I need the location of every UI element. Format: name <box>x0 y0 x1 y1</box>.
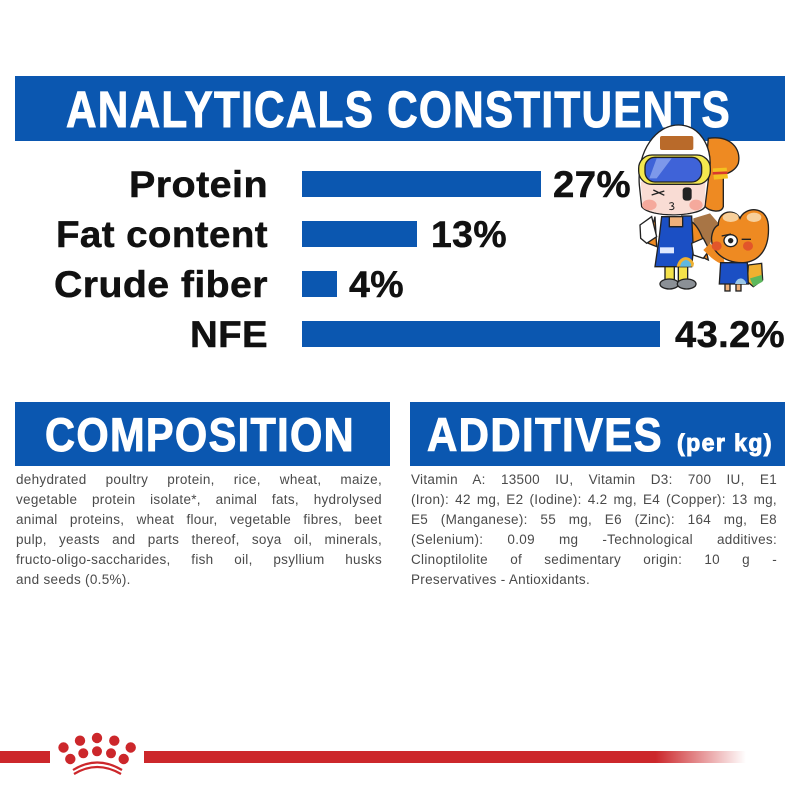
bear <box>703 210 768 291</box>
additives text <box>411 472 777 587</box>
row: NFE: 43.2% <box>675 314 785 355</box>
composition text <box>16 472 382 587</box>
row: crude fiber: 4% <box>349 264 404 305</box>
row: fat content: Fat content <box>56 214 268 255</box>
row: fat content: 13% <box>431 214 507 255</box>
row: NFE: NFE <box>190 314 268 355</box>
additives text: Preservatives - Antioxidants. <box>411 572 590 587</box>
row: fat content <box>56 214 507 255</box>
bar chart: analytical constituents <box>54 164 785 355</box>
composition text: pulp, yeasts and parts thereof, soya oil, minerals, <box>16 532 382 547</box>
additives text: Clinoptilolite of sedimentary origin: 10 g - <box>411 552 777 567</box>
additives text: (Iron): 42 mg, E2 (Iodine): 4.2 mg, E4 (Copper): 13 mg, <box>411 492 777 507</box>
additives heading: (per kg) <box>677 430 773 457</box>
composition text: vegetable protein isolate*, animal fats, hydrolysed <box>16 492 382 507</box>
row: crude fiber <box>54 264 404 305</box>
additives text: Vitamin A: 13500 IU, Vitamin D3: 700 IU, E1 <box>411 472 777 487</box>
composition text: animal proteins, wheat flour, vegetable fibres, beet <box>16 512 382 527</box>
row: protein <box>129 164 631 205</box>
additives heading: ADDITIVES <box>427 408 663 461</box>
composition text: and seeds (0.5%). <box>16 572 131 587</box>
composition text: fructo-oligo-saccharides, fish oil, psyllium husks <box>16 552 382 567</box>
row: protein: 27% <box>553 164 631 205</box>
row: protein: Protein <box>129 164 268 205</box>
row: NFE <box>190 314 785 355</box>
additives text: E5 (Manganese): 55 mg, E6 (Zinc): 164 mg, E8 <box>411 512 777 527</box>
icon: royal crown logo <box>58 733 136 774</box>
composition heading: COMPOSITION <box>45 408 355 461</box>
footer red line right <box>144 751 746 763</box>
footer red line left <box>0 751 50 763</box>
mascot sticker: girl and orange bear <box>639 125 768 291</box>
additives heading <box>410 402 785 466</box>
composition text: dehydrated poultry protein, rice, wheat, maize, <box>16 472 382 487</box>
additives text: (Selenium): 0.09 mg -Technological additives: <box>411 532 777 547</box>
row: crude fiber: Crude fiber <box>54 264 268 305</box>
girl <box>639 125 739 289</box>
